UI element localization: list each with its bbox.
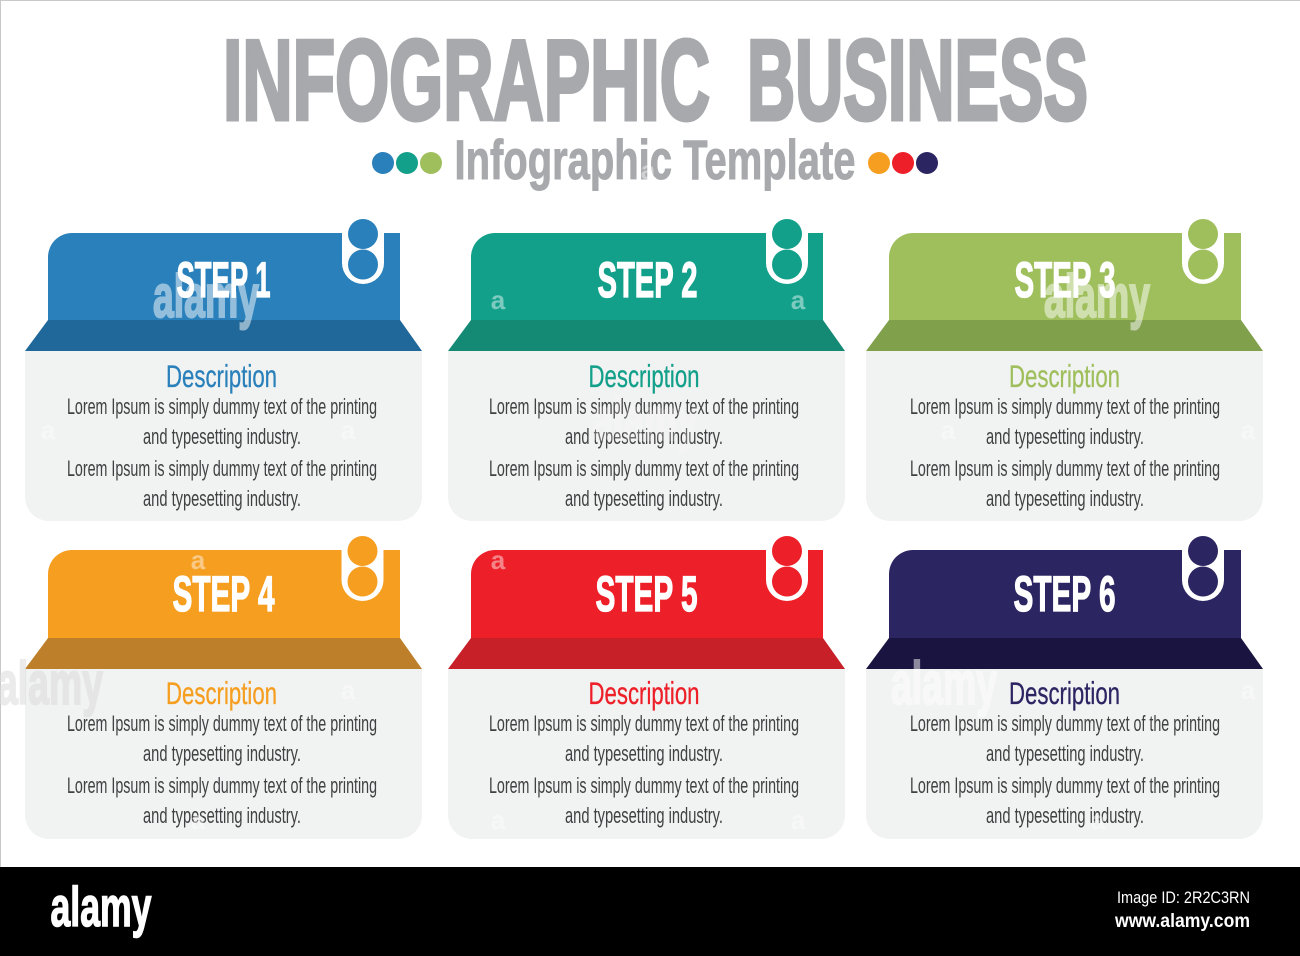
panel: step 1 <box>25 219 422 521</box>
body text: and typesetting industry. <box>565 424 723 449</box>
body text: and typesetting industry. <box>986 741 1144 766</box>
body text: and typesetting industry. <box>986 486 1144 511</box>
fold band <box>25 638 422 669</box>
panel: step 6 <box>866 536 1263 839</box>
body text <box>910 711 1220 828</box>
header tab <box>889 550 1241 638</box>
body text: Lorem Ipsum is simply dummy text of the printing <box>67 711 377 736</box>
small watermark marks <box>41 155 1256 835</box>
small watermark marks: a <box>791 805 806 835</box>
body text <box>489 394 799 511</box>
watermark: alamy <box>0 650 103 717</box>
body text: Lorem Ipsum is simply dummy text of the printing <box>489 711 799 736</box>
description heading: Description <box>1009 675 1120 711</box>
small watermark marks: a <box>491 285 506 315</box>
header tab <box>48 233 400 320</box>
fold band <box>866 320 1263 351</box>
small watermark marks: a <box>491 805 506 835</box>
header tab <box>471 233 823 320</box>
body text: and typesetting industry. <box>565 741 723 766</box>
panel: step 2 <box>448 219 845 521</box>
body text: and typesetting industry. <box>143 424 301 449</box>
body text: and typesetting industry. <box>143 486 301 511</box>
website: www.alamy.com <box>1114 911 1250 932</box>
body text: Lorem Ipsum is simply dummy text of the printing <box>67 394 377 419</box>
step label: STEP 3 <box>1014 252 1116 308</box>
step label: STEP 4 <box>172 566 275 622</box>
footer logo: alamy <box>50 875 152 938</box>
icon: rings <box>342 219 384 284</box>
step label: STEP 5 <box>596 566 698 622</box>
small watermark marks: a <box>1241 415 1256 445</box>
description heading: Description <box>588 358 700 394</box>
icon: rings <box>342 536 384 601</box>
body text: and typesetting industry. <box>565 803 723 828</box>
description heading: Description <box>166 358 277 394</box>
small watermark marks: a <box>191 805 206 835</box>
step label: STEP 2 <box>598 252 698 308</box>
header tab <box>471 550 823 638</box>
small watermark marks: a <box>1241 675 1256 705</box>
body text: and typesetting industry. <box>986 803 1144 828</box>
small watermark marks: a <box>491 545 506 575</box>
small watermark marks: a <box>941 415 956 445</box>
body card <box>866 351 1263 521</box>
subtitle row with dots <box>372 128 938 191</box>
fold band <box>25 320 422 351</box>
description heading: Description <box>588 675 700 711</box>
body card <box>25 669 422 839</box>
body text <box>910 394 1220 511</box>
fold band <box>866 638 1263 669</box>
small watermark marks: a <box>641 155 656 185</box>
small watermark marks: a <box>791 285 806 315</box>
small watermark marks: a <box>341 675 356 705</box>
body text <box>489 711 799 828</box>
watermark: alamy <box>592 386 698 453</box>
header tab <box>889 233 1241 320</box>
title: INFOGRAPHIC <box>223 18 710 144</box>
body card <box>866 669 1263 839</box>
body text: Lorem Ipsum is simply dummy text of the printing <box>67 773 377 798</box>
step label: STEP 1 <box>176 252 270 308</box>
right dots <box>868 152 938 174</box>
image id: Image ID: 2R2C3RN <box>1117 889 1250 907</box>
subtitle: Infographic Template <box>454 128 856 191</box>
small watermark marks: a <box>191 545 206 575</box>
header tab <box>48 550 400 638</box>
watermark: alamy <box>153 263 259 330</box>
description heading: Description <box>1009 358 1120 394</box>
body text <box>67 394 377 511</box>
icon: rings <box>1182 219 1224 284</box>
fold band <box>448 638 845 669</box>
body text: Lorem Ipsum is simply dummy text of the printing <box>489 456 799 481</box>
watermark: alamy <box>891 650 997 717</box>
body text: and typesetting industry. <box>143 741 301 766</box>
footer bar <box>0 867 1300 956</box>
left dots <box>372 152 442 174</box>
small watermark marks: a <box>341 415 356 445</box>
small watermark marks: a <box>1091 805 1106 835</box>
body text: and typesetting industry. <box>143 803 301 828</box>
body text <box>67 711 377 828</box>
panel: step 4 <box>0 536 422 839</box>
icon: rings <box>1182 536 1224 601</box>
icon: rings <box>766 219 808 284</box>
fold band <box>448 320 845 351</box>
body text: and typesetting industry. <box>565 486 723 511</box>
body text: Lorem Ipsum is simply dummy text of the printing <box>489 773 799 798</box>
panel: step 5 <box>448 536 845 839</box>
body card <box>448 669 845 839</box>
watermark: alamy <box>1044 263 1150 330</box>
small watermark marks: a <box>41 415 56 445</box>
panel: step 3 <box>866 219 1263 521</box>
icon: rings <box>766 536 808 601</box>
body card <box>25 351 422 521</box>
body card <box>448 351 845 521</box>
description heading: Description <box>166 675 277 711</box>
step label: STEP 6 <box>1014 566 1116 622</box>
body text: Lorem Ipsum is simply dummy text of the printing <box>489 394 799 419</box>
body text: and typesetting industry. <box>986 424 1144 449</box>
body text: Lorem Ipsum is simply dummy text of the printing <box>67 456 377 481</box>
